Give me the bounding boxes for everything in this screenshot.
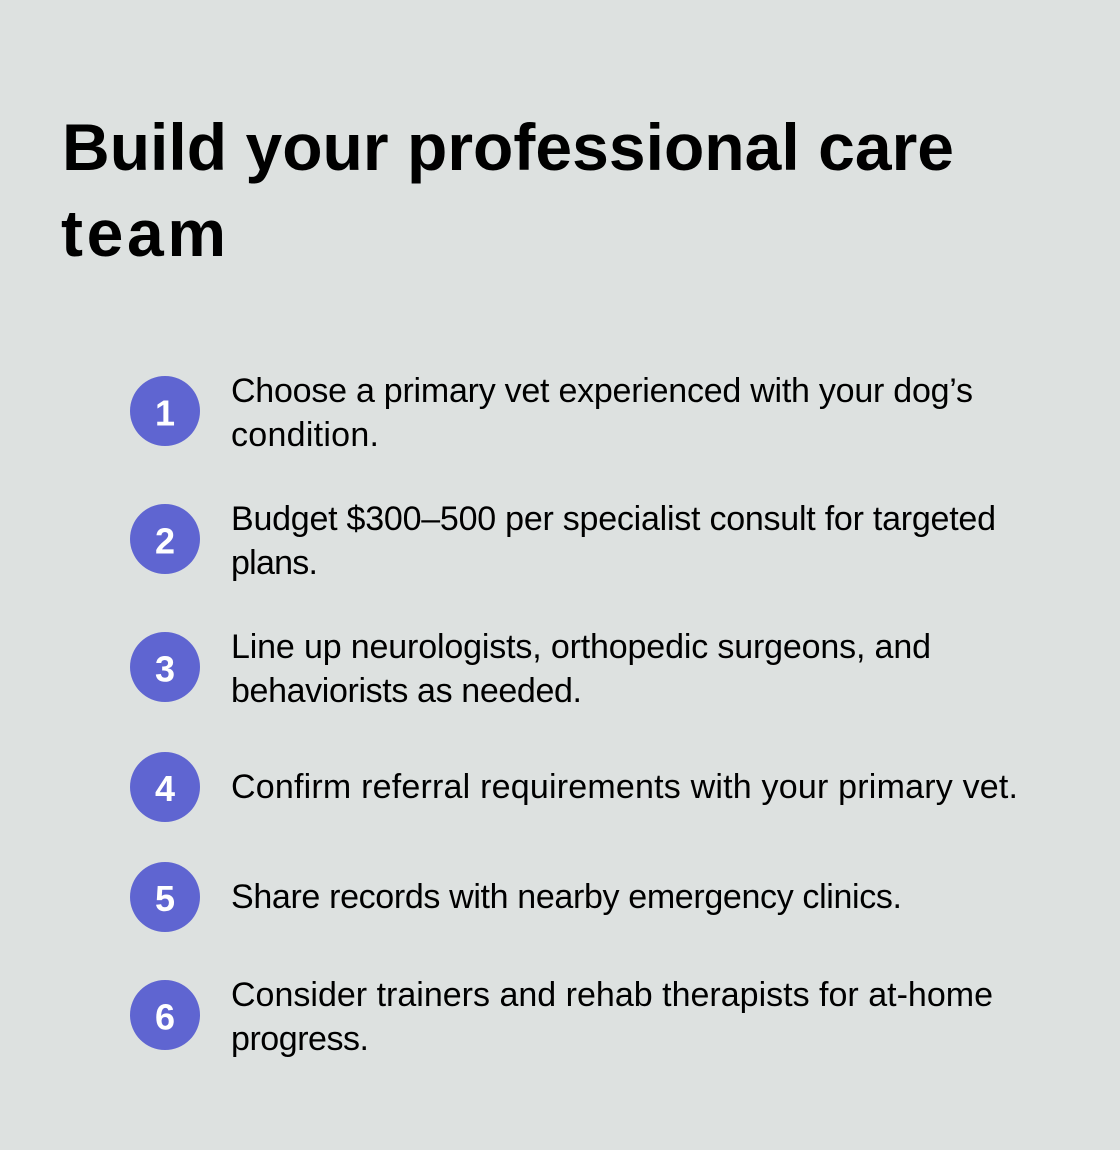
step 4 number badge [130,752,200,822]
step 5 number badge: 5 [155,878,175,919]
step 6 number badge: 6 [155,996,175,1038]
step 2 number badge: 2 [155,520,175,562]
step 3 text: Line up neurologists, orthopedic surgeons, and [231,628,931,666]
step 1 number badge [130,376,200,446]
step 3 text [231,628,931,710]
step 1 [130,372,973,454]
step 6 text [231,976,993,1058]
step 1 text: Choose a primary vet experienced with your dog’s [231,372,973,410]
step 5 number badge [130,862,200,932]
step 5 [130,862,902,932]
step 3 number badge [130,632,200,702]
step 6 number badge [130,980,200,1050]
step 6 text: progress. [231,1020,369,1058]
step 4 number badge: 4 [155,768,175,809]
step 3 number badge: 3 [155,648,175,690]
title: team [61,196,226,270]
step 3 text: behaviorists as needed. [231,672,582,710]
step 4 text: Confirm referral requirements with your primary vet. [231,768,1018,806]
step 2 text [231,500,996,582]
step 6 [130,976,993,1058]
title [61,110,954,270]
step 2 text: Budget $300–500 per specialist consult for targeted [231,500,996,538]
step 6 text: Consider trainers and rehab therapists for at-home [231,976,993,1014]
step 1 number badge: 1 [155,392,175,434]
title: Build your professional care [62,110,954,184]
step 1 text [231,372,973,454]
step 2 [130,500,996,582]
step 5 text: Share records with nearby emergency clinics. [231,878,902,916]
step 1 text: condition. [231,416,379,454]
step 2 number badge [130,504,200,574]
step 2 text: plans. [231,544,318,582]
step 4 [130,752,1018,822]
step 3 [130,628,931,710]
